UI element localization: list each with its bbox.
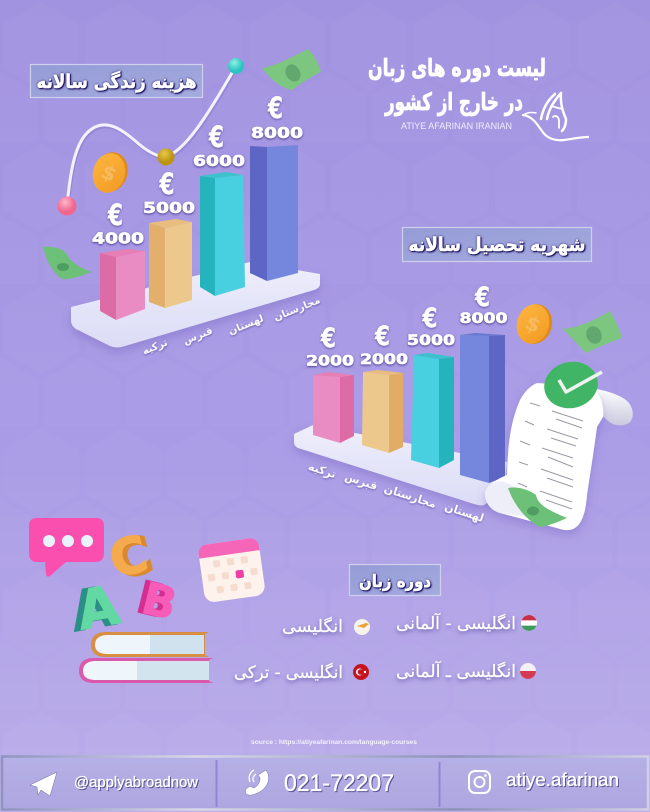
icon: coin: $ bbox=[98, 159, 120, 187]
illustration: letter A: A bbox=[72, 573, 124, 643]
header title bbox=[368, 54, 546, 132]
value: 8000: 8000 bbox=[460, 311, 508, 327]
telegram handle: @applyabroadnow bbox=[74, 774, 198, 791]
header title: ATIYE AFARINAN IRANIAN bbox=[401, 121, 512, 132]
heading: annual living cost bbox=[30, 64, 202, 98]
row: Hungary: انگلیسی - آلمانی bbox=[396, 612, 516, 634]
illustration: letter B: B bbox=[132, 572, 177, 630]
axis labels: مجارستان bbox=[272, 295, 322, 324]
header title: لیست دوره های زبان bbox=[368, 54, 546, 82]
row: Cyprus: انگلیسی bbox=[282, 616, 343, 637]
value: 8000: € bbox=[267, 91, 283, 125]
bar: Turkey 2000 bbox=[313, 372, 354, 443]
axis labels: قبرس bbox=[182, 326, 214, 347]
value: 5000 bbox=[143, 167, 195, 217]
value: 6000: 6000 bbox=[193, 152, 245, 170]
icon: logo bbox=[523, 93, 588, 140]
instagram handle: atiye.afarinan bbox=[506, 770, 619, 790]
icon: money left bbox=[43, 247, 92, 279]
icon: coin: $ bbox=[522, 310, 544, 338]
row: Cyprus bbox=[282, 616, 370, 637]
heading: annual tuition: شهریه تحصیل سالانه bbox=[408, 234, 586, 256]
trend curve bbox=[58, 58, 244, 216]
header title: در خارج از کشور bbox=[384, 88, 523, 116]
icon: coin bbox=[88, 148, 132, 196]
icon: money bbox=[563, 311, 622, 353]
row: Poland: انگلیسی ـ آلمانی bbox=[396, 660, 516, 682]
value: 8000 bbox=[251, 91, 303, 142]
illustration: letter C: C bbox=[108, 525, 158, 590]
value: 2000 Cyprus: € bbox=[374, 321, 390, 352]
bar: Hungary 5000 bbox=[411, 353, 454, 468]
platform bbox=[71, 262, 320, 348]
illustration: books bbox=[79, 632, 213, 683]
bar: Poland 6000 bbox=[200, 172, 245, 296]
value: 4000: 4000 bbox=[92, 230, 144, 248]
value: 5000: € bbox=[422, 303, 438, 334]
icon: money top bbox=[262, 49, 321, 90]
axis labels: ترکیه bbox=[307, 460, 338, 481]
value: 4000: € bbox=[107, 198, 123, 232]
platform bbox=[294, 425, 507, 505]
source note: source : https://atiyeafarinan.com/language-courses bbox=[251, 739, 417, 746]
value: 2000 Turkey: 2000 bbox=[306, 354, 354, 370]
axis labels: مجارستان bbox=[382, 482, 438, 511]
axis labels: قبرس bbox=[343, 470, 379, 493]
value: 5000: € bbox=[159, 167, 174, 201]
illustration: calendar bbox=[197, 537, 266, 603]
value: 6000 bbox=[193, 120, 245, 170]
heading: language course bbox=[350, 564, 440, 596]
axis labels: لهستان bbox=[227, 313, 265, 337]
bar: Cyprus 2000 bbox=[362, 370, 403, 453]
panel: language course bbox=[234, 564, 537, 683]
icon: instagram bbox=[469, 771, 490, 793]
illustration: letter B: B bbox=[137, 573, 182, 631]
value: 5000: 5000 bbox=[407, 333, 455, 349]
value: 2000 Cyprus: 2000 bbox=[360, 352, 408, 368]
icon: telegram bbox=[30, 772, 57, 796]
icon: money bottom bbox=[508, 487, 567, 527]
panel: annual living cost chart bbox=[30, 49, 322, 357]
icon: coin bbox=[512, 300, 557, 348]
value: 5000: 5000 bbox=[143, 199, 195, 217]
heading: annual tuition bbox=[402, 228, 592, 262]
illustration: letter C: C bbox=[104, 524, 153, 590]
value: 2000 Turkey: € bbox=[320, 323, 336, 354]
illustration: speech bubble bbox=[29, 518, 104, 577]
value: 8000 bbox=[460, 282, 508, 327]
heading: annual living cost: هزینه زندگی سالانه bbox=[36, 70, 196, 93]
bar: Hungary 8000 bbox=[250, 145, 298, 281]
icon: check badge bbox=[539, 356, 603, 414]
icon: receipt bbox=[485, 383, 633, 530]
panel: annual tuition chart bbox=[294, 228, 633, 530]
value: 8000: € bbox=[474, 282, 490, 313]
value: 5000 bbox=[407, 303, 455, 349]
value: 2000 Cyprus bbox=[360, 321, 408, 368]
footer bar bbox=[2, 756, 648, 810]
axis labels bbox=[141, 295, 322, 357]
value: 6000: € bbox=[208, 120, 224, 154]
value: 8000: 8000 bbox=[251, 124, 303, 142]
value: 4000 bbox=[92, 198, 144, 248]
value: 2000 Turkey bbox=[306, 323, 354, 370]
axis labels: لهستان bbox=[443, 500, 485, 525]
phone number: 021-72207 bbox=[284, 770, 394, 797]
axis labels bbox=[307, 460, 485, 525]
bar: Cyprus 5000 bbox=[149, 219, 192, 308]
icon: phone bbox=[245, 770, 269, 795]
row: Turkey: انگلیسی - ترکی bbox=[234, 662, 343, 683]
heading: language course: دوره زبان bbox=[359, 572, 431, 592]
axis labels: ترکیه bbox=[141, 337, 169, 357]
illustration: letter A: A bbox=[66, 574, 119, 644]
bar: Poland 8000 bbox=[460, 333, 505, 483]
bar: Turkey 4000 bbox=[100, 249, 145, 320]
